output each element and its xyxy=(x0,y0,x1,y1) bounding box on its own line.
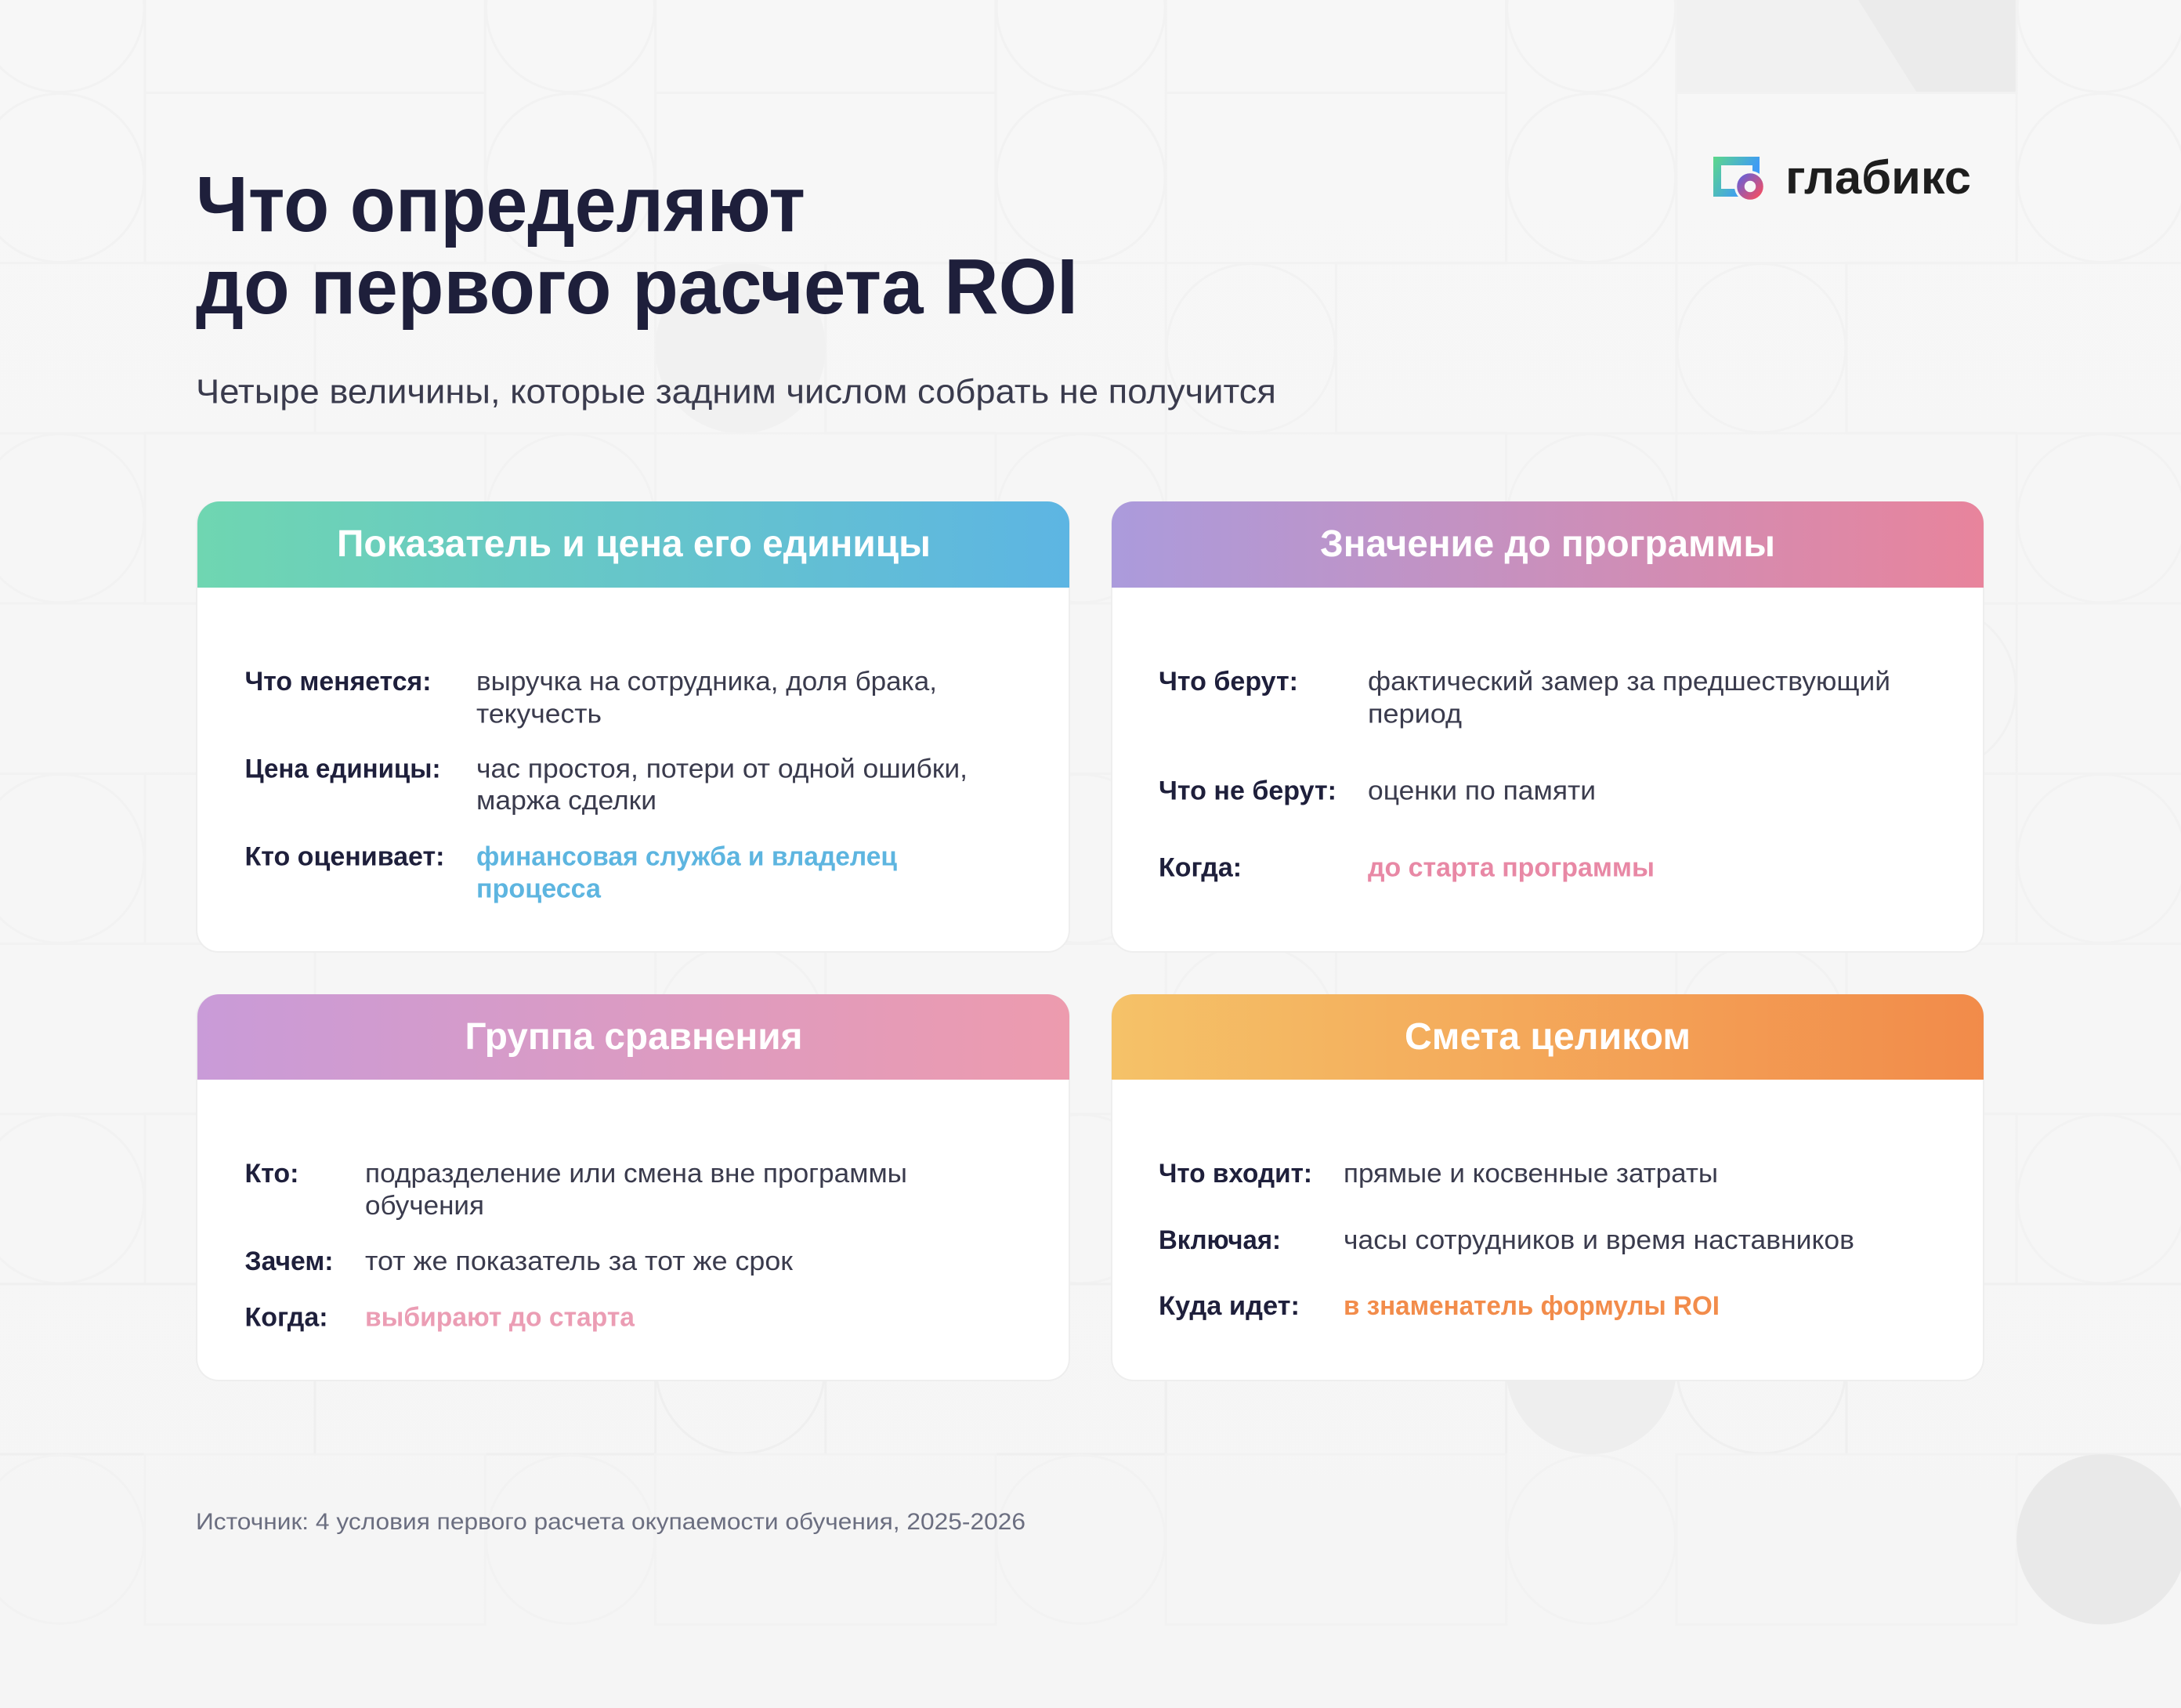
icon: logo mark xyxy=(1713,157,1766,202)
row: что меняется xyxy=(244,667,937,729)
panel heading xyxy=(1112,501,1984,588)
row: куда идет: в знаменатель формулы ROI xyxy=(1344,1291,1720,1321)
row: включая: Включая: xyxy=(1159,1225,1281,1255)
row: кто xyxy=(244,1159,907,1221)
panel heading xyxy=(197,994,1069,1080)
row: кто: Кто: xyxy=(244,1159,299,1189)
logo: глабикс xyxy=(1713,151,1971,204)
row: цена единицы: маржа сделки xyxy=(476,786,656,816)
panel: Смета целиком xyxy=(1112,994,1984,1381)
title: Что определяют xyxy=(196,161,805,248)
row: когда: выбирают до старта xyxy=(365,1302,635,1332)
row: когда: Когда: xyxy=(244,1302,327,1332)
row: кто оценивает: Кто оценивает: xyxy=(244,841,445,871)
row: кто: обучения xyxy=(365,1191,484,1221)
row: кто: подразделение или смена вне программы xyxy=(365,1159,907,1189)
row: зачем: тот же показатель за тот же срок xyxy=(365,1247,794,1276)
panel heading xyxy=(197,501,1069,588)
source footnote: Источник: 4 условия первого расчета окупаемости обучения, 2025-2026 xyxy=(196,1509,1025,1535)
panel heading: Группа сравнения xyxy=(465,1016,802,1058)
row: что берут: период xyxy=(1368,699,1462,729)
panel heading xyxy=(1112,994,1984,1080)
row: что берут: Что берут: xyxy=(1159,667,1298,697)
header: title and subtitle xyxy=(196,161,1276,411)
row: что входит: прямые и косвенные затраты xyxy=(1344,1159,1718,1189)
row: что не берут: оценки по памяти xyxy=(1368,776,1596,805)
row: что входит xyxy=(1159,1159,1718,1189)
row: что меняется: текучесть xyxy=(476,699,602,729)
row: цена единицы xyxy=(244,754,968,816)
row: куда идет: Куда идет: xyxy=(1159,1291,1300,1321)
title: до первого расчета ROI xyxy=(196,243,1078,331)
row: цена единицы: Цена единицы: xyxy=(244,754,440,783)
row: что берут: фактический замер за предшествующий xyxy=(1368,667,1890,697)
panel heading: Значение до программы xyxy=(1320,523,1775,565)
title xyxy=(196,161,1078,331)
row: когда xyxy=(244,1302,635,1332)
row: куда идет xyxy=(1159,1291,1720,1321)
row: что берут xyxy=(1159,667,1890,729)
row: что меняется: Что меняется: xyxy=(244,667,431,697)
row: кто оценивает: процесса xyxy=(476,874,602,904)
row: когда: Когда: xyxy=(1159,852,1242,882)
row: кто оценивает: финансовая служба и владелец xyxy=(476,841,897,871)
panel heading: Показатель и цена его единицы xyxy=(337,523,931,565)
row: включая: часы сотрудников и время наставников xyxy=(1344,1225,1854,1255)
logo wordmark: глабикс xyxy=(1785,151,1971,204)
panel: Значение до программы xyxy=(1112,501,1984,952)
row: что входит: Что входит: xyxy=(1159,1159,1312,1189)
row: когда xyxy=(1159,852,1655,882)
row: что меняется: выручка на сотрудника, доля брака, xyxy=(476,667,937,697)
row: когда: до старта программы xyxy=(1368,852,1655,882)
row: цена единицы: час простоя, потери от одной ошибки, xyxy=(476,754,968,783)
panel heading: Смета целиком xyxy=(1405,1016,1691,1058)
row: что не берут xyxy=(1159,776,1596,805)
panel: Показатель и цена его единицы xyxy=(197,501,1069,952)
row: кто оценивает xyxy=(244,841,897,904)
row: что не берут: Что не берут: xyxy=(1159,776,1336,805)
row: зачем: Зачем: xyxy=(244,1247,334,1276)
panel: Группа сравнения xyxy=(197,994,1069,1381)
subtitle: Четыре величины, которые задним числом собрать не получится xyxy=(196,373,1276,411)
